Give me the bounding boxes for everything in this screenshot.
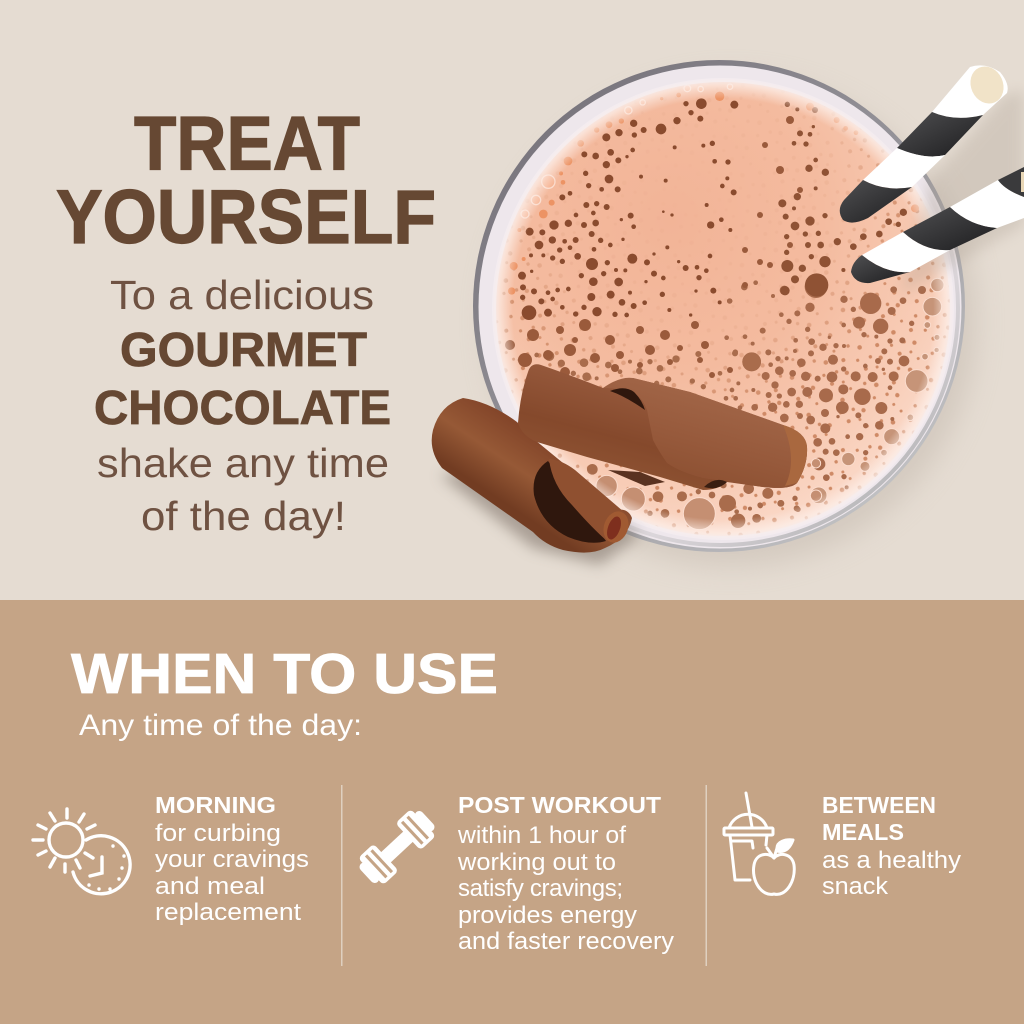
subheading: Any time of the day: — [79, 709, 362, 742]
between meals column text: BETWEEN — [822, 792, 936, 818]
straw two — [851, 167, 1024, 283]
headline: treat yourself and tagline — [56, 102, 436, 539]
headline: treat yourself and tagline: CHOCOLATE — [94, 382, 391, 435]
foam bubbles — [490, 70, 960, 550]
divider left — [341, 785, 342, 966]
morning column text: for curbing — [155, 820, 281, 847]
post workout column text: and faster recovery — [458, 928, 674, 955]
icon: dumbbell — [354, 805, 440, 889]
illustration: glass of chocolate shake — [473, 60, 976, 566]
icon: shake cup and apple — [724, 793, 794, 894]
post workout column text: working out to — [457, 849, 616, 876]
illustration: chocolate curls — [432, 364, 807, 565]
right curl — [518, 364, 807, 490]
between meals column text: as a healthy — [822, 847, 961, 874]
bubbles lower left — [518, 350, 822, 530]
morning column text: MORNING — [155, 792, 276, 818]
panel: top background — [0, 0, 1024, 600]
headline: treat yourself and tagline: To a delicious — [110, 272, 374, 318]
post workout column text: provides energy — [458, 902, 637, 929]
between meals column text: snack — [822, 873, 889, 900]
headline: treat yourself and tagline: YOURSELF — [56, 175, 436, 260]
bubbles lower right — [720, 275, 944, 528]
between meals column text — [822, 792, 961, 900]
morning column text: your cravings — [155, 846, 309, 873]
bubbles upper right — [778, 102, 919, 297]
between meals column text: MEALS — [822, 819, 904, 845]
post workout column text — [457, 792, 674, 955]
straw one — [840, 61, 1010, 223]
post workout column text: POST WORKOUT — [458, 792, 661, 818]
bubbles upper left — [508, 84, 738, 320]
bubbles filling gaps — [505, 107, 818, 378]
morning column text — [155, 792, 309, 926]
post workout column text: within 1 hour of — [457, 822, 626, 849]
liquid surface — [496, 82, 950, 536]
soft white edge of the foam — [492, 78, 954, 540]
stray chip — [608, 470, 665, 486]
headline: treat yourself and tagline: GOURMET — [120, 324, 367, 377]
left curl — [432, 398, 633, 553]
heading: when to use: WHEN TO USE — [71, 642, 498, 706]
morning column text: replacement — [155, 899, 301, 926]
illustration: striped paper straws — [840, 61, 1024, 295]
morning column text: and meal — [155, 873, 265, 900]
panel: bottom background — [0, 600, 1024, 1024]
headline: treat yourself and tagline: TREAT — [134, 102, 360, 186]
post workout column text: satisfy cravings; — [458, 875, 623, 902]
icon: sun and clock — [33, 809, 130, 894]
headline: treat yourself and tagline: shake any time — [97, 440, 389, 486]
divider right — [706, 785, 707, 966]
headline: treat yourself and tagline: of the day! — [141, 493, 346, 539]
